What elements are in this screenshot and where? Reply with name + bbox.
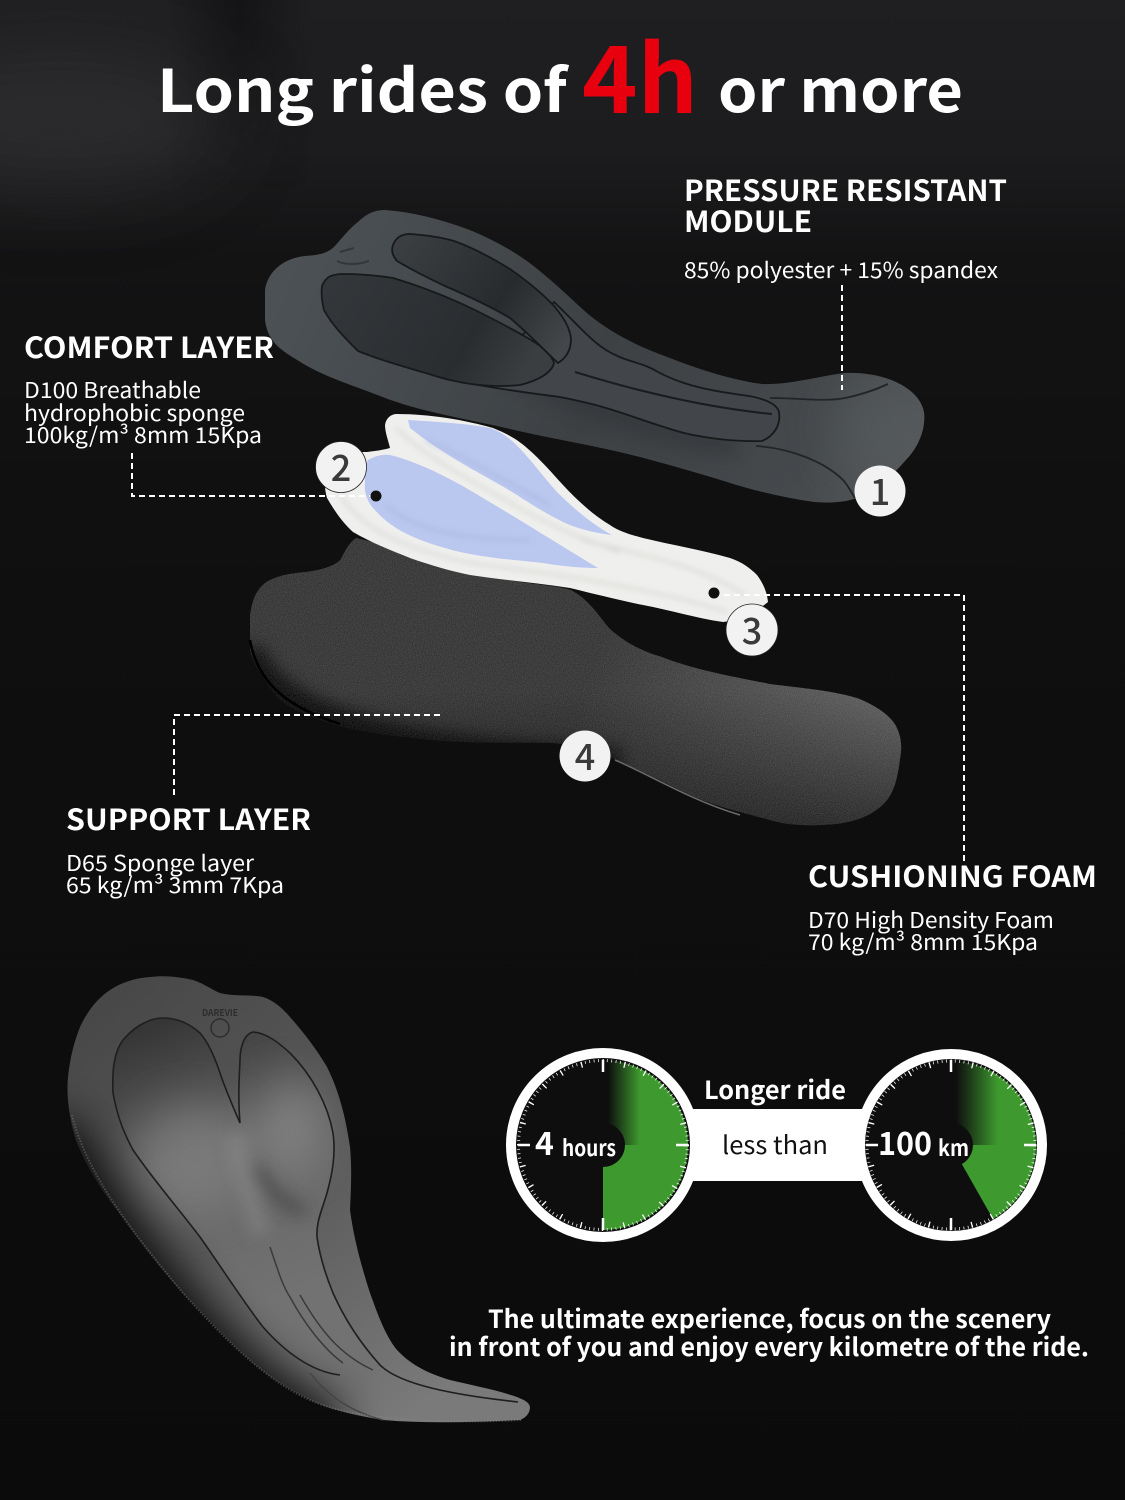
gauge: 100 km: km	[938, 1131, 969, 1163]
text: less than: less than	[722, 1126, 828, 1162]
label: cushioning foam	[808, 854, 1097, 957]
bottom pad view: DAREVIE	[202, 1006, 238, 1019]
label: cushioning foam: D70 High Density Foam	[808, 903, 1054, 935]
gauge: 4 hours: 4	[535, 1119, 554, 1165]
number badge 2: 2	[331, 440, 351, 492]
leader line: comfort layer	[132, 453, 376, 496]
label: pressure resistant module: MODULE	[684, 199, 812, 241]
label: comfort layer: COMFORT LAYER	[24, 325, 274, 367]
label: comfort layer: D100 Breathable	[24, 373, 201, 405]
title: 4h	[582, 5, 698, 140]
pad layer 1: pressure resistant module	[265, 210, 930, 503]
closing statement	[449, 1300, 1089, 1364]
blue insert lower	[365, 455, 598, 568]
leader line: cushioning foam	[714, 595, 964, 862]
bottom pad view	[50, 976, 530, 1432]
number badge 3: 3	[742, 603, 762, 655]
gauge comparison graphic	[511, 1053, 1042, 1237]
connector bar	[680, 1109, 870, 1181]
label: comfort layer: hydrophobic sponge	[24, 396, 245, 428]
gauge: 4 hours: hours	[562, 1131, 616, 1163]
gauge: 100 km: 100	[878, 1119, 932, 1165]
closing statement: The ultimate experience, focus on the scenery	[488, 1300, 1052, 1336]
leader line: support layer	[174, 715, 440, 798]
closing statement: in front of you and enjoy every kilometre of the ride.	[449, 1328, 1089, 1364]
label: support layer: SUPPORT LAYER	[66, 797, 311, 839]
pad layer 4: support layer	[240, 530, 910, 830]
upper lobe	[392, 234, 571, 363]
label: pressure resistant module: PRESSURE RESISTANT	[684, 168, 1007, 210]
number badge 3	[726, 603, 778, 656]
label: support layer: 65 kg/m³ 3mm 7Kpa	[66, 868, 284, 900]
leader line: pressure resistant module	[841, 285, 843, 390]
background	[0, 0, 1125, 254]
gauge: 4 hours	[511, 1053, 695, 1237]
title: Long rides of	[157, 44, 569, 129]
label: comfort layer	[24, 325, 274, 450]
blue insert upper	[408, 420, 612, 535]
number badge 4	[560, 729, 610, 782]
inner heart panel	[114, 1018, 338, 1346]
lower-left shadow	[50, 1125, 335, 1432]
title: or more	[718, 44, 963, 129]
label: cushioning foam: 70 kg/m³ 8mm 15Kpa	[808, 925, 1038, 957]
marker dot: cushioning foam	[708, 588, 720, 598]
lower lobe	[322, 274, 554, 386]
label: pressure resistant module: 85% polyester + 15% spandex	[684, 253, 998, 285]
marker dot: comfort layer	[370, 490, 382, 502]
number badge 2	[316, 440, 366, 492]
gauge: 100 km	[860, 1054, 1042, 1236]
label: support layer	[66, 797, 311, 900]
number badge 4: 4	[575, 729, 595, 781]
label: comfort layer: 100kg/m³ 8mm 15Kpa	[24, 418, 262, 450]
number badge 1: 1	[870, 464, 890, 516]
label: support layer: D65 Sponge layer	[66, 846, 254, 878]
title	[157, 5, 963, 140]
channel ribs	[432, 302, 779, 441]
label: cushioning foam: CUSHIONING FOAM	[808, 854, 1097, 896]
pad layer 2 and 3: comfort layer and cushioning foam	[325, 414, 768, 622]
label: pressure resistant module	[684, 168, 1007, 285]
number badge 1	[854, 464, 906, 516]
heading: longer ride: Longer ride	[704, 1071, 846, 1107]
